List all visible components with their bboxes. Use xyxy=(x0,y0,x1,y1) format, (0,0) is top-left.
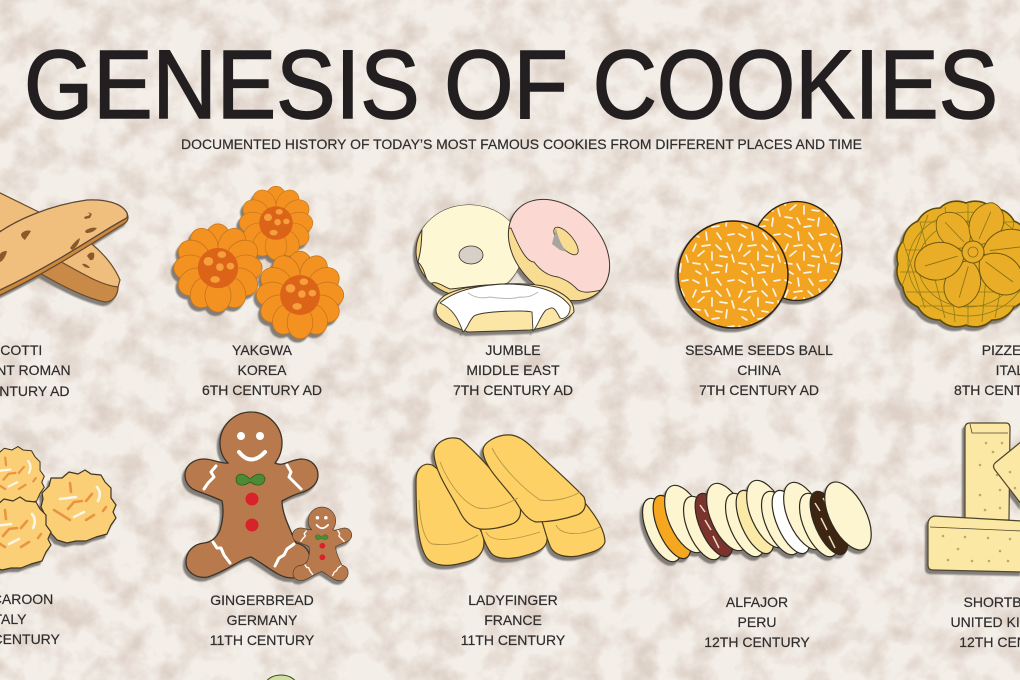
label: alfajor: ALFAJOR xyxy=(726,594,788,610)
icon: shortbread xyxy=(928,423,1020,572)
label: sesame seeds ball: SESAME SEEDS BALL xyxy=(685,342,833,358)
label: gingerbread: GINGERBREAD xyxy=(210,592,314,608)
label: gingerbread: GERMANY xyxy=(227,612,298,628)
icon: pizzelle xyxy=(897,197,1020,327)
icon: biscotti xyxy=(0,190,128,302)
label: jumble: MIDDLE EAST xyxy=(466,362,560,378)
label: gingerbread: 11TH CENTURY xyxy=(210,632,315,648)
label: ladyfinger: LADYFINGER xyxy=(468,592,558,608)
icon: jumble xyxy=(412,198,610,337)
icon: gingerbread xyxy=(185,412,352,581)
icon: ladyfinger xyxy=(416,435,605,565)
label: yakgwa: YAKGWA xyxy=(232,342,293,358)
icon: macaroon xyxy=(0,447,116,570)
label: ladyfinger: FRANCE xyxy=(484,612,542,628)
label: alfajor: 12TH CENTURY xyxy=(704,634,810,650)
icon: partial green cookie at bottom edge xyxy=(265,675,297,680)
label: yakgwa: KOREA xyxy=(237,362,287,378)
icon: alfajor xyxy=(634,474,881,567)
label: ladyfinger: 11TH CENTURY xyxy=(461,632,566,648)
icon: yakgwa xyxy=(173,186,344,339)
label: jumble: 7TH CENTURY AD xyxy=(453,382,573,398)
label: yakgwa: 6TH CENTURY AD xyxy=(202,382,322,398)
label: sesame seeds ball: 7TH CENTURY AD xyxy=(699,382,819,398)
label: sesame seeds ball: CHINA xyxy=(737,362,781,378)
label: jumble: JUMBLE xyxy=(485,342,541,358)
subtitle: DOCUMENTED HISTORY OF TODAY’S MOST FAMOUS COOKIES FROM DIFFERENT PLACES AND TIME xyxy=(181,136,862,152)
icon: sesame seeds ball xyxy=(678,202,842,328)
label: alfajor: PERU xyxy=(738,614,776,630)
